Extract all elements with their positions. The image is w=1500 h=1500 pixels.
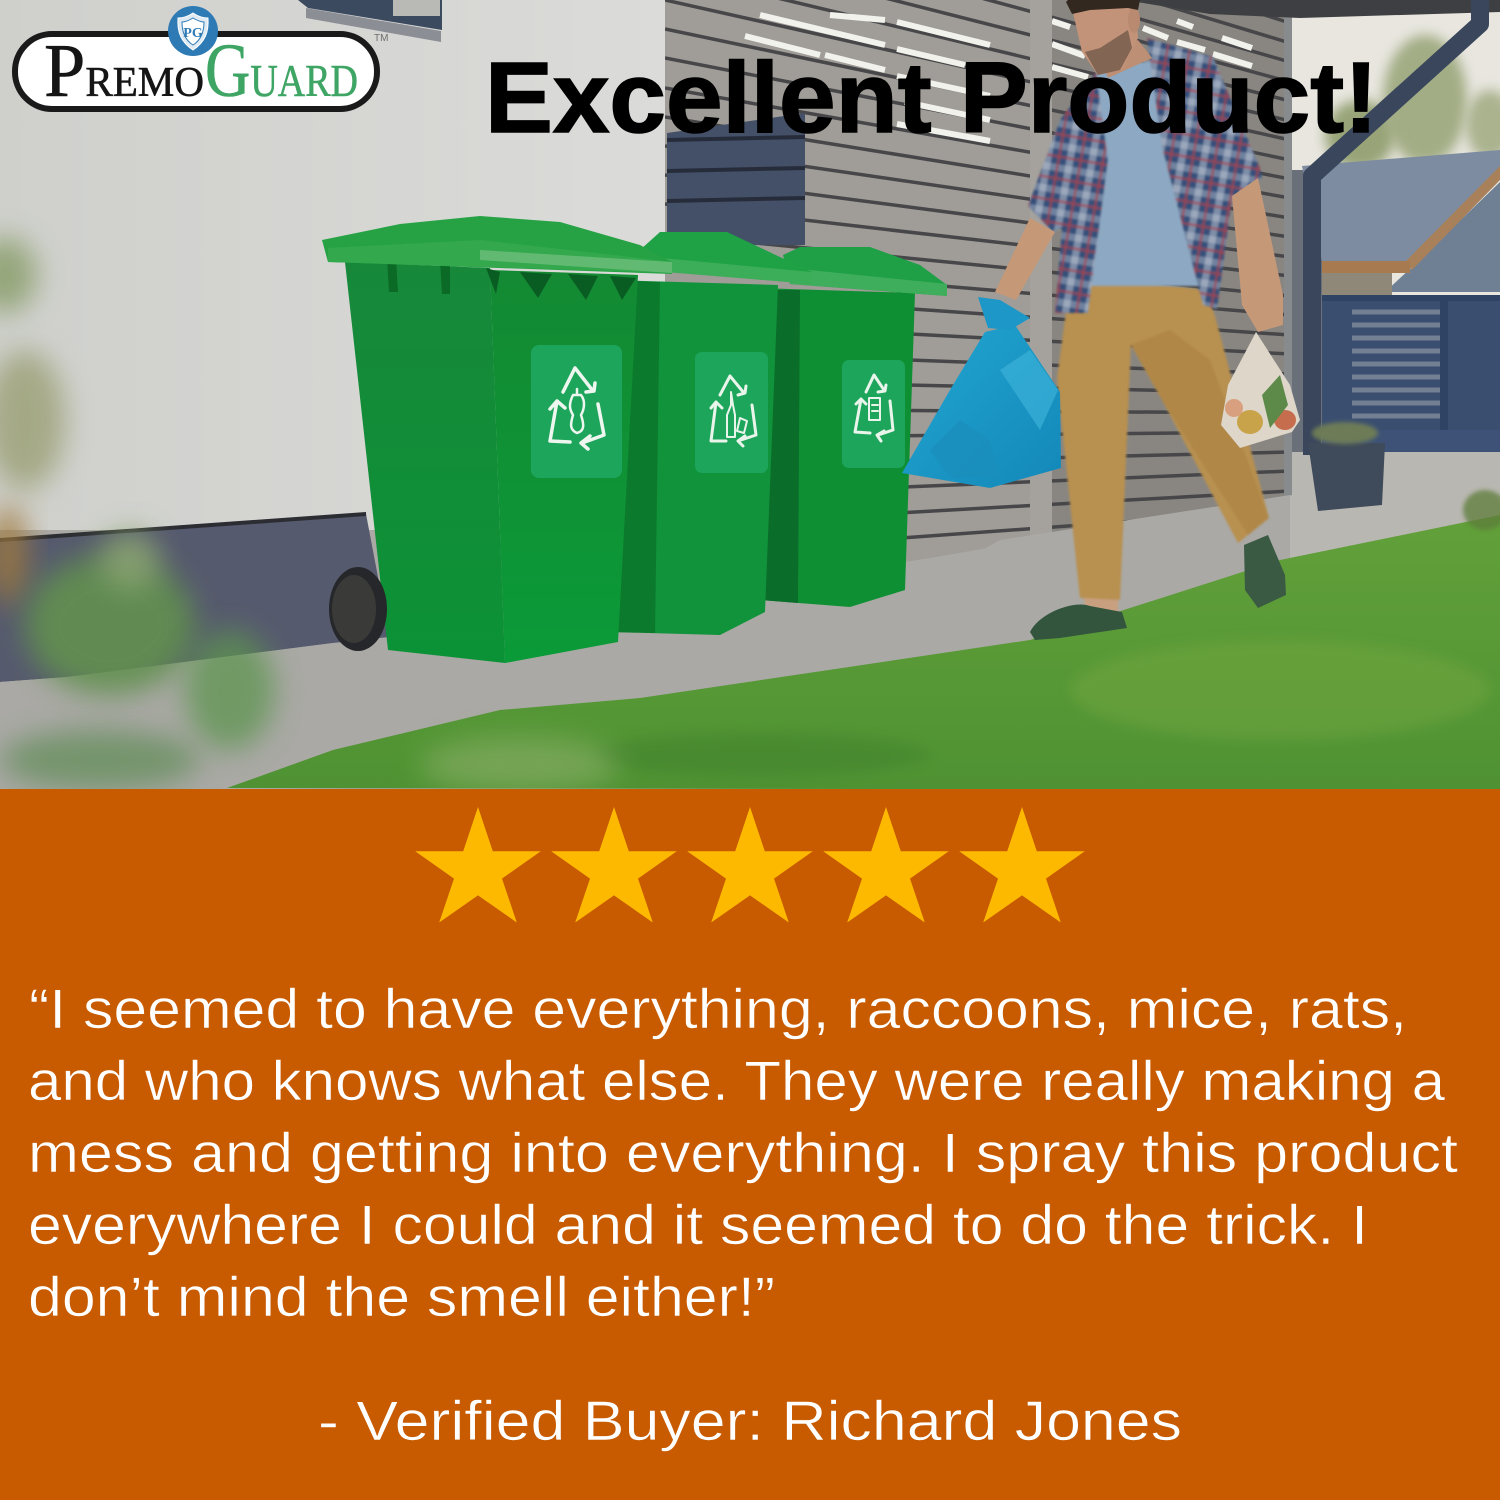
logo shield badge: PG <box>183 26 203 41</box>
bin 2 label <box>695 352 768 473</box>
logo wordmark: PREMO <box>44 29 204 113</box>
planter pot <box>1308 422 1385 511</box>
blue trash bag <box>902 297 1061 488</box>
recycling bin 3 <box>760 247 947 607</box>
window sill <box>298 0 442 42</box>
reviewer attribution: - Verified Buyer: Richard Jones <box>318 1389 1182 1452</box>
bin 3 label <box>842 360 905 468</box>
review quote: “I seemed to have everything, raccoons, mice, rats, <box>29 977 1407 1040</box>
wall plinth <box>0 514 390 682</box>
recycling bin 1 <box>322 216 672 663</box>
eaves <box>1125 0 1500 18</box>
logo: GUARD <box>205 29 358 113</box>
background sky and trees <box>1285 0 1500 460</box>
wooden slat fence <box>665 0 1305 600</box>
review quote: everywhere I could and it seemed to do the trick. I <box>28 1193 1368 1256</box>
trademark: TM <box>374 33 388 44</box>
review quote: don’t mind the smell either!” <box>28 1265 775 1328</box>
recycling bin 2 <box>610 232 812 635</box>
photo: man taking out trash beside green bins <box>0 0 1500 793</box>
skin at ankles <box>1084 598 1118 612</box>
plastic bag with produce <box>1221 332 1300 448</box>
title: Excellent Product! <box>485 42 1378 154</box>
man: head <box>1066 0 1152 78</box>
bin wheel <box>329 567 387 651</box>
downpipe <box>1312 0 1480 455</box>
man: legs <box>1057 274 1269 612</box>
man: torso and shirt <box>1028 38 1262 313</box>
lawn <box>227 515 1500 790</box>
review quote <box>28 977 1458 1328</box>
foreground blurred foliage <box>0 237 620 793</box>
five star rating <box>415 807 1085 922</box>
panel: review <box>0 789 1500 1500</box>
foreground shrub right <box>1463 490 1500 530</box>
dark post block <box>667 113 805 245</box>
pavement <box>0 495 1290 790</box>
review quote: and who knows what else. They were really making a <box>28 1049 1446 1112</box>
man: arms <box>995 178 1283 332</box>
logo pill <box>15 34 377 109</box>
wall <box>0 0 665 530</box>
driveway <box>1290 452 1500 560</box>
review quote: mess and getting into everything. I spray this product <box>28 1121 1458 1184</box>
logo shield badge <box>168 6 218 56</box>
house roof <box>1302 150 1500 295</box>
pavement base <box>0 0 1500 790</box>
bin 1 label <box>531 345 622 478</box>
navy fence behind <box>1322 295 1500 452</box>
man: shoes <box>1030 535 1286 640</box>
logo <box>15 6 388 113</box>
